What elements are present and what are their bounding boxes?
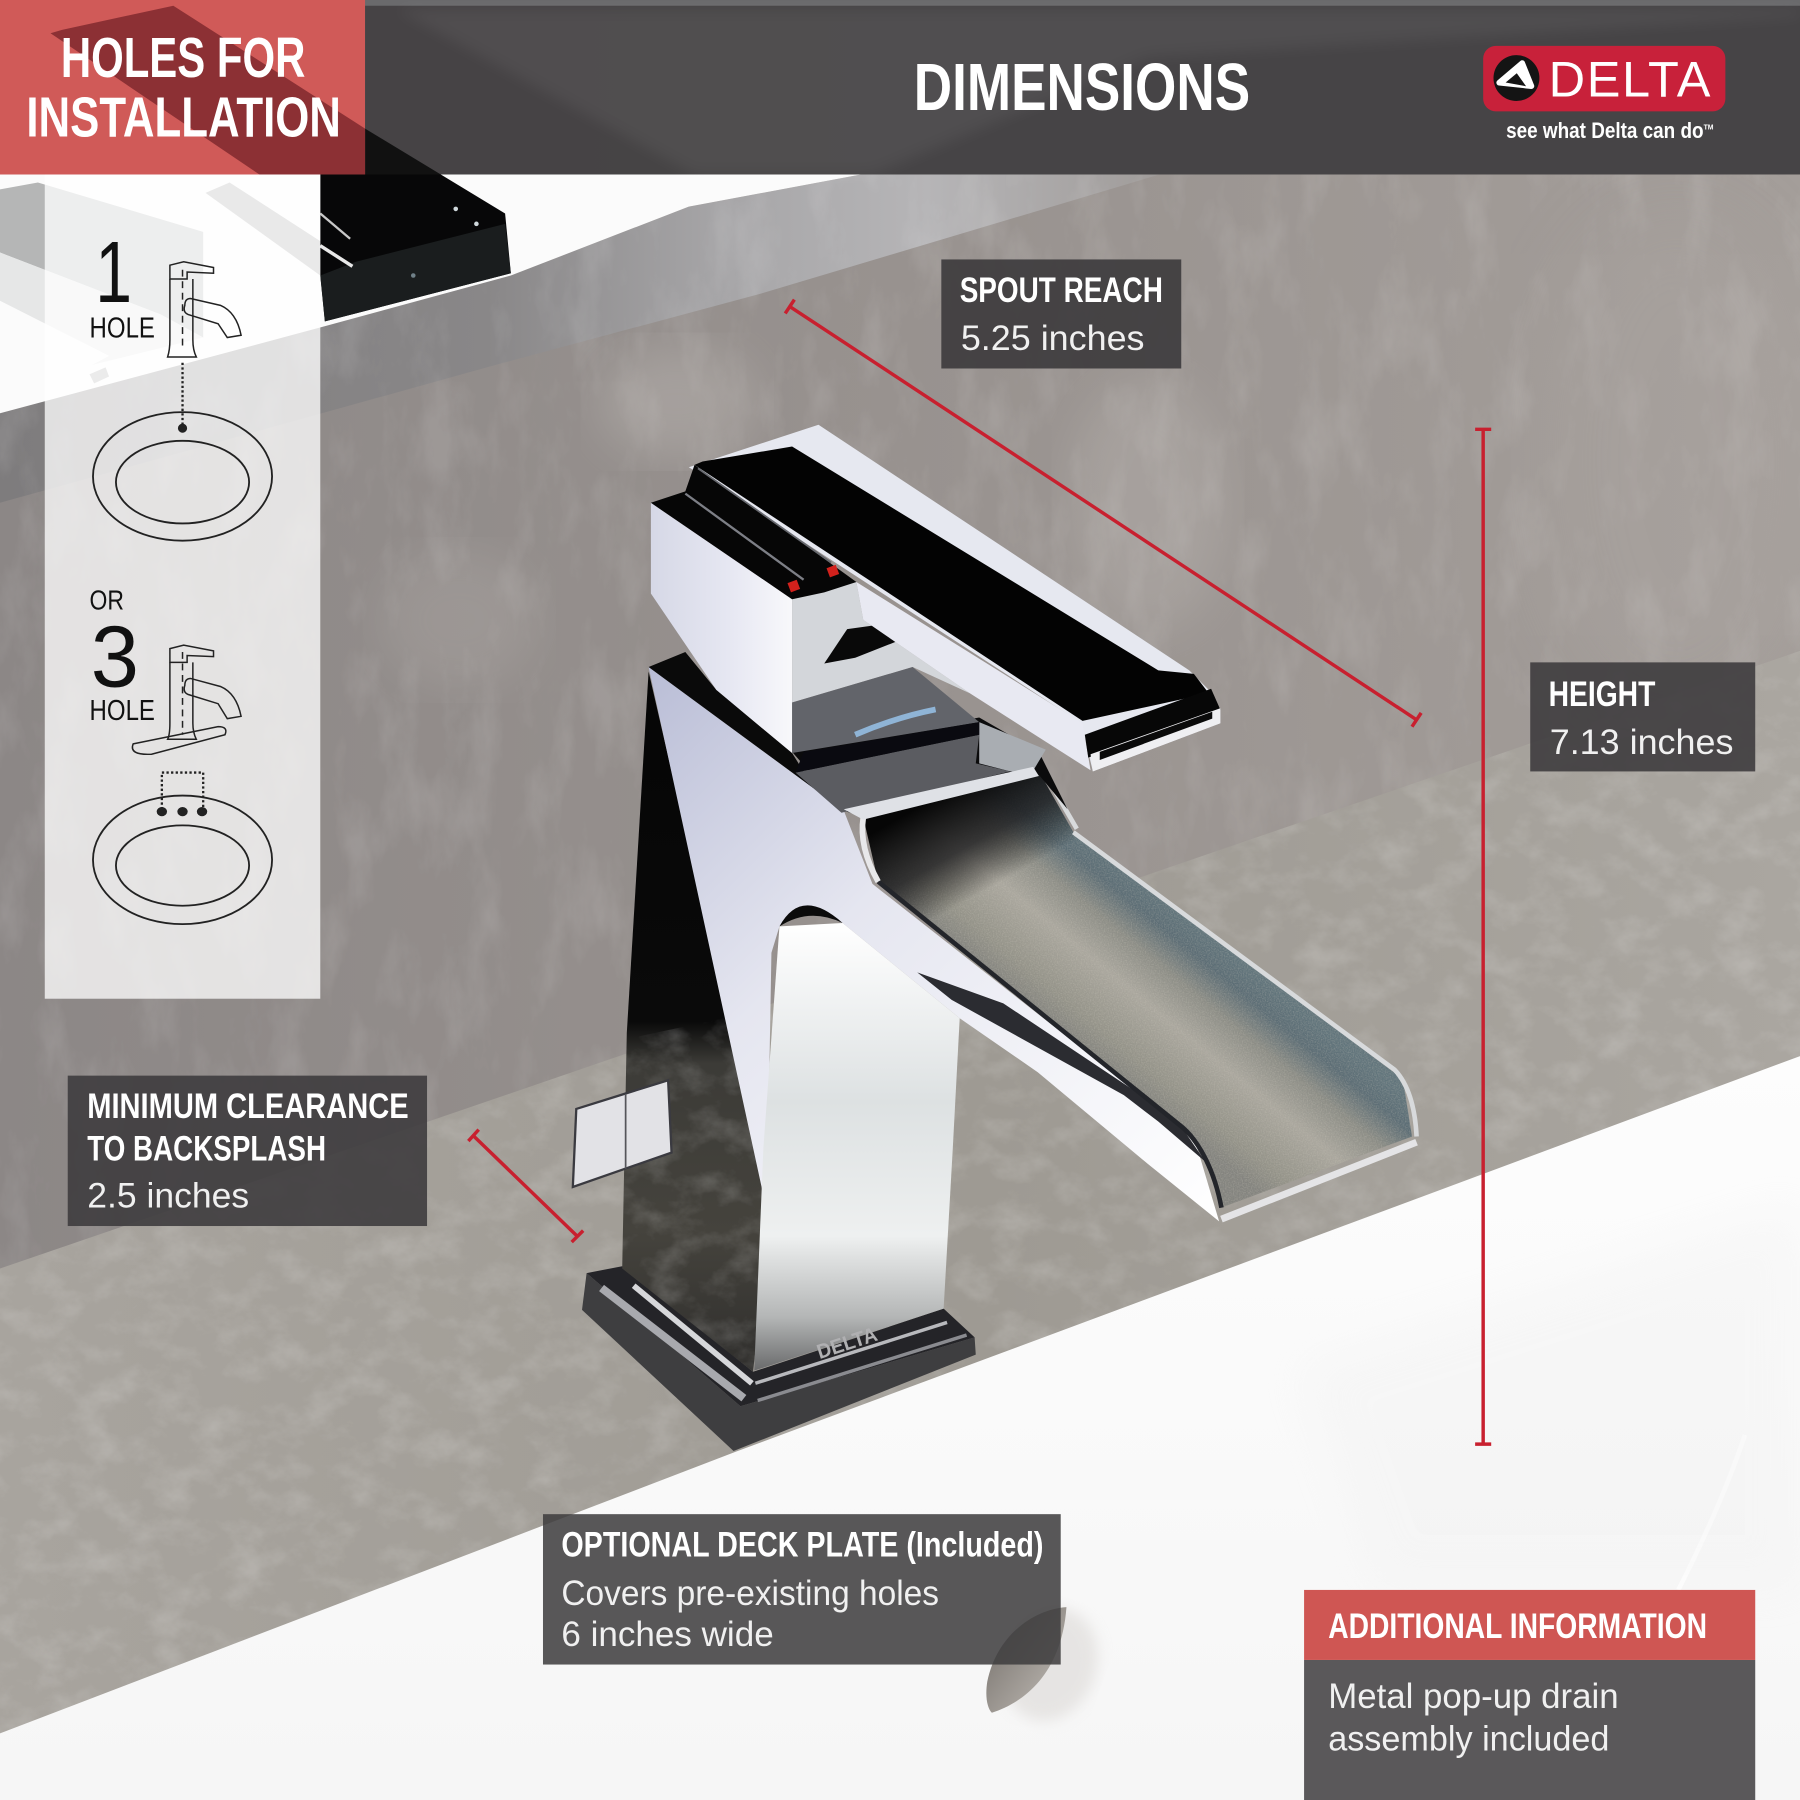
icon: single hole faucet <box>168 262 241 357</box>
faucet column <box>754 905 960 1371</box>
label: or 3 hole <box>90 585 155 727</box>
faucet chrome front face <box>649 667 1219 1221</box>
icon: faucet with deck plate <box>132 645 241 754</box>
callout: height: HEIGHT <box>1549 674 1656 714</box>
label: 1 hole: HOLE <box>90 313 155 345</box>
handle black slot <box>651 465 856 599</box>
handle neck <box>792 582 979 773</box>
lever black face <box>695 447 1209 721</box>
dimension line: backsplash clearance <box>468 1130 583 1242</box>
handle side block <box>651 503 792 753</box>
logo: delta: see what Delta can do <box>1506 118 1704 143</box>
red title panel: holes for installation: HOLES FOR <box>61 26 305 89</box>
callout: optional deck plate <box>543 1514 1061 1665</box>
logo: delta <box>1483 46 1725 143</box>
lever tip <box>1085 689 1220 771</box>
lever chrome strip <box>856 582 1091 770</box>
dotted rectangle and three holes <box>157 773 207 816</box>
callout: spout reach <box>941 259 1181 368</box>
callout: optional deck plate: OPTIONAL DECK PLATE (Included) <box>561 1525 1043 1565</box>
label: or 3 hole: 3 <box>91 608 139 705</box>
faucet photo <box>573 425 1423 1451</box>
label: or 3 hole: HOLE <box>90 695 155 727</box>
logo: delta: DELTA <box>1549 50 1711 107</box>
header bar <box>0 0 1800 174</box>
faucet body dark side <box>622 672 762 1372</box>
red title panel: holes for installation: INSTALLATION <box>26 86 341 149</box>
icon: delta triad <box>1493 55 1539 101</box>
callout: spout reach: SPOUT REACH <box>960 270 1163 310</box>
callout: optional deck plate: 6 inches wide <box>561 1614 774 1654</box>
icon: sink basin three holes <box>93 796 272 924</box>
red indicators <box>788 565 839 592</box>
callout: minimum clearance: 2.5 inches <box>87 1176 249 1216</box>
panel: additional information: ADDITIONAL INFORMATION <box>1328 1606 1707 1646</box>
panel: additional information <box>1304 1590 1755 1800</box>
label: 1 hole <box>90 224 155 344</box>
panel: additional information: Metal pop-up drain <box>1328 1676 1619 1716</box>
background: white sink <box>0 1056 1800 1800</box>
dimension line: spout reach <box>785 300 1421 727</box>
base engraving: DELTA <box>814 1323 880 1364</box>
background: mirrored ledge reflection <box>0 129 861 413</box>
background: counter top <box>0 651 1800 1734</box>
spout underside reflection <box>917 972 1205 1162</box>
panel: hole installation options <box>45 174 320 999</box>
label: or 3 hole: OR <box>90 585 124 616</box>
callout: height <box>1530 662 1755 771</box>
logo: delta: TM <box>1704 125 1714 132</box>
label: 1 hole: 1 <box>95 224 132 321</box>
red title panel: holes for installation <box>0 0 365 174</box>
dimension line: height <box>1475 428 1491 1445</box>
background: wall <box>0 174 1800 1268</box>
callout: minimum clearance <box>68 1076 427 1226</box>
callout: minimum clearance: MINIMUM CLEARANCE <box>87 1086 409 1126</box>
drain lift knob <box>573 1080 672 1187</box>
icon: sink basin one hole <box>93 412 272 541</box>
callout: minimum clearance: TO BACKSPLASH <box>87 1129 326 1169</box>
faucet base <box>582 1266 976 1451</box>
dotted guide line and hole <box>178 363 187 433</box>
callout: height: 7.13 inches <box>1550 722 1733 762</box>
callout: optional deck plate: Covers pre-existing holes <box>561 1573 939 1613</box>
black granite edge <box>320 129 511 321</box>
panel: additional information: assembly included <box>1328 1719 1609 1759</box>
callout: spout reach: 5.25 inches <box>961 318 1145 358</box>
spout trough <box>861 763 1423 1219</box>
handle <box>651 425 1220 773</box>
neck collar <box>792 717 1068 820</box>
handle lever chrome <box>689 425 1220 771</box>
shadow wedge above chrome face <box>649 652 844 810</box>
drain <box>986 1595 1113 1734</box>
heading: dimensions: DIMENSIONS <box>914 51 1250 125</box>
